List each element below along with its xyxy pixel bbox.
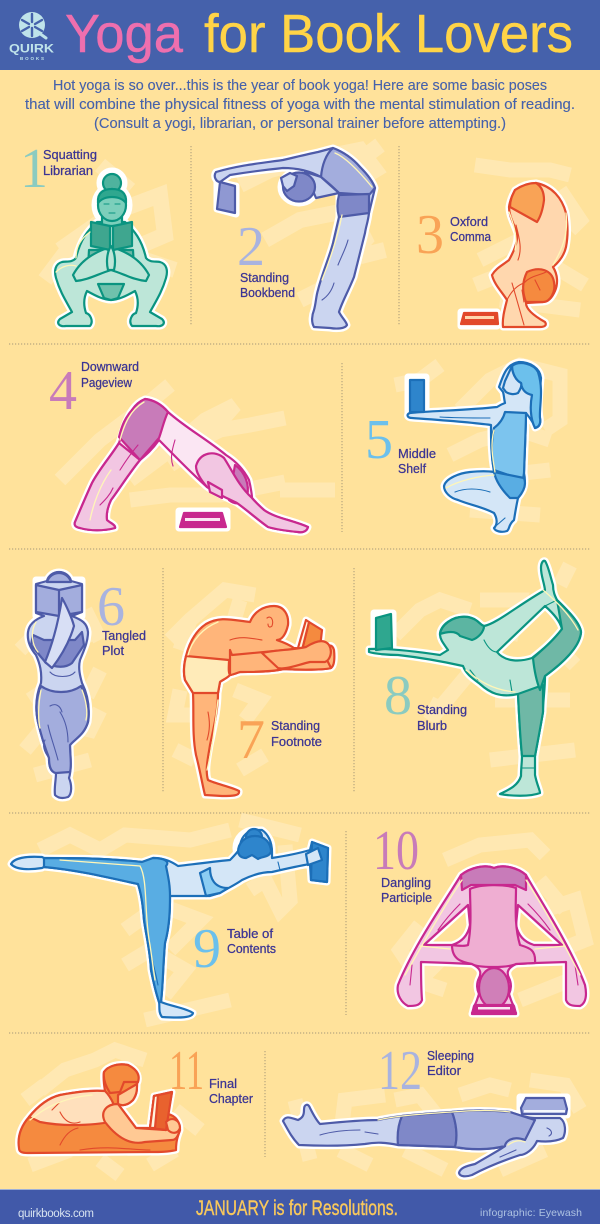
intro text: Hot yoga is so over...this is the year of book yoga! Here are some basic poses	[53, 78, 547, 94]
panel: pose 3	[416, 165, 585, 327]
header banner	[0, 0, 600, 70]
label: Standing Footnote: Footnote	[271, 735, 322, 749]
figure: middle shelf	[408, 362, 541, 532]
number 12: 12	[378, 1040, 422, 1102]
label: Standing Bookbend: Standing	[240, 271, 289, 285]
label: Tangled Plot: Tangled	[102, 629, 146, 643]
label: Squatting Librarian: Squatting	[43, 148, 97, 162]
footer: website: quirkbooks.com	[18, 1208, 94, 1220]
label: Sleeping Editor: Editor	[427, 1064, 461, 1078]
label: Standing Blurb	[417, 703, 467, 733]
panel: pose 6	[20, 572, 146, 798]
number 7: 7	[237, 709, 265, 771]
icon: Quirk Books logo	[9, 12, 54, 61]
footer: credit: infographic: Eyewash	[480, 1207, 582, 1219]
label: Sleeping Editor	[427, 1049, 474, 1078]
label: Middle Shelf: Middle	[398, 447, 436, 461]
label: Dangling Participle: Dangling	[381, 876, 431, 890]
footer: tagline: JANUARY is for Resolutions.	[196, 1197, 398, 1220]
title: Yoga	[65, 4, 184, 64]
number 3: 3	[416, 204, 444, 266]
intro text	[25, 78, 575, 132]
panel: pose 11	[19, 1040, 253, 1175]
label: Tangled Plot	[102, 629, 146, 658]
intro text: (Consult a yogi, librarian, or personal trainer before attempting.)	[94, 116, 506, 132]
label: Middle Shelf	[398, 447, 436, 476]
number 11: 11	[169, 1040, 204, 1102]
panel: pose 9	[11, 820, 328, 1020]
figure: sleeping editor	[283, 1097, 567, 1176]
label: Final Chapter	[209, 1077, 253, 1106]
label: Standing Footnote	[271, 719, 322, 749]
number 9: 9	[193, 918, 221, 980]
label: Downward Pageview	[81, 360, 139, 390]
label: Standing Bookbend	[240, 271, 295, 300]
figure: dangling participle	[398, 866, 586, 1014]
panel: pose 2	[215, 145, 385, 329]
figure: standing blurb	[369, 561, 581, 796]
label: Dangling Participle: Participle	[381, 891, 432, 905]
label: Middle Shelf: Shelf	[398, 462, 427, 476]
number 1: 1	[20, 138, 48, 200]
label: Sleeping Editor: Sleeping	[427, 1049, 474, 1063]
label: Table of Contents: Contents	[227, 942, 276, 956]
label: Final Chapter: Chapter	[209, 1092, 253, 1106]
label: Downward Pageview: Downward	[81, 360, 139, 374]
number 6: 6	[97, 576, 125, 638]
number 8: 8	[384, 665, 412, 727]
figure: standing bookbend	[215, 148, 375, 329]
footer banner	[0, 1189, 600, 1224]
panel: pose 4	[49, 360, 335, 532]
panel: pose 7	[170, 590, 334, 796]
label: Oxford Comma: Comma	[450, 230, 491, 244]
figure: standing footnote	[184, 606, 334, 796]
panel: pose 5	[365, 362, 560, 532]
label: Squatting Librarian: Librarian	[43, 164, 93, 178]
number 5: 5	[365, 409, 393, 471]
label: Standing Blurb: Blurb	[417, 719, 447, 733]
figure: table of contents	[11, 829, 328, 1018]
figure: tangled plot	[28, 572, 89, 798]
label: Standing Bookbend: Bookbend	[240, 286, 295, 300]
label: Table of Contents	[227, 927, 276, 956]
number 10: 10	[373, 820, 419, 882]
label: Dangling Participle	[381, 876, 432, 905]
title: for Book Lovers	[204, 4, 573, 64]
panel: pose 1	[20, 138, 175, 326]
intro text: that will combine the physical fitness of yoga with the mental stimulation of reading.	[25, 97, 575, 113]
icon: Quirk Books logo: BOOKS	[20, 56, 44, 61]
label: Table of Contents: Table of	[227, 927, 274, 941]
figure: Oxford comma	[461, 183, 568, 327]
panel: pose 12	[283, 1040, 580, 1176]
number 2: 2	[237, 216, 265, 278]
label: Final Chapter: Final	[209, 1077, 237, 1091]
label: Squatting Librarian	[43, 148, 97, 178]
label: Downward Pageview: Pageview	[81, 376, 133, 390]
panel: pose 10	[373, 820, 586, 1014]
figure: downward pageview	[75, 399, 308, 532]
label: Standing Blurb: Standing	[417, 703, 467, 717]
number 4: 4	[49, 360, 77, 422]
label: Oxford Comma: Oxford	[450, 215, 488, 229]
label: Standing Footnote: Standing	[271, 719, 320, 733]
label: Tangled Plot: Plot	[102, 644, 125, 658]
label: Oxford Comma	[450, 215, 491, 244]
icon: Quirk Books logo: QUIRK	[9, 42, 54, 56]
panel: pose 8	[369, 561, 581, 796]
figure: final chapter	[19, 1064, 180, 1153]
figure: squatting librarian	[55, 171, 167, 326]
